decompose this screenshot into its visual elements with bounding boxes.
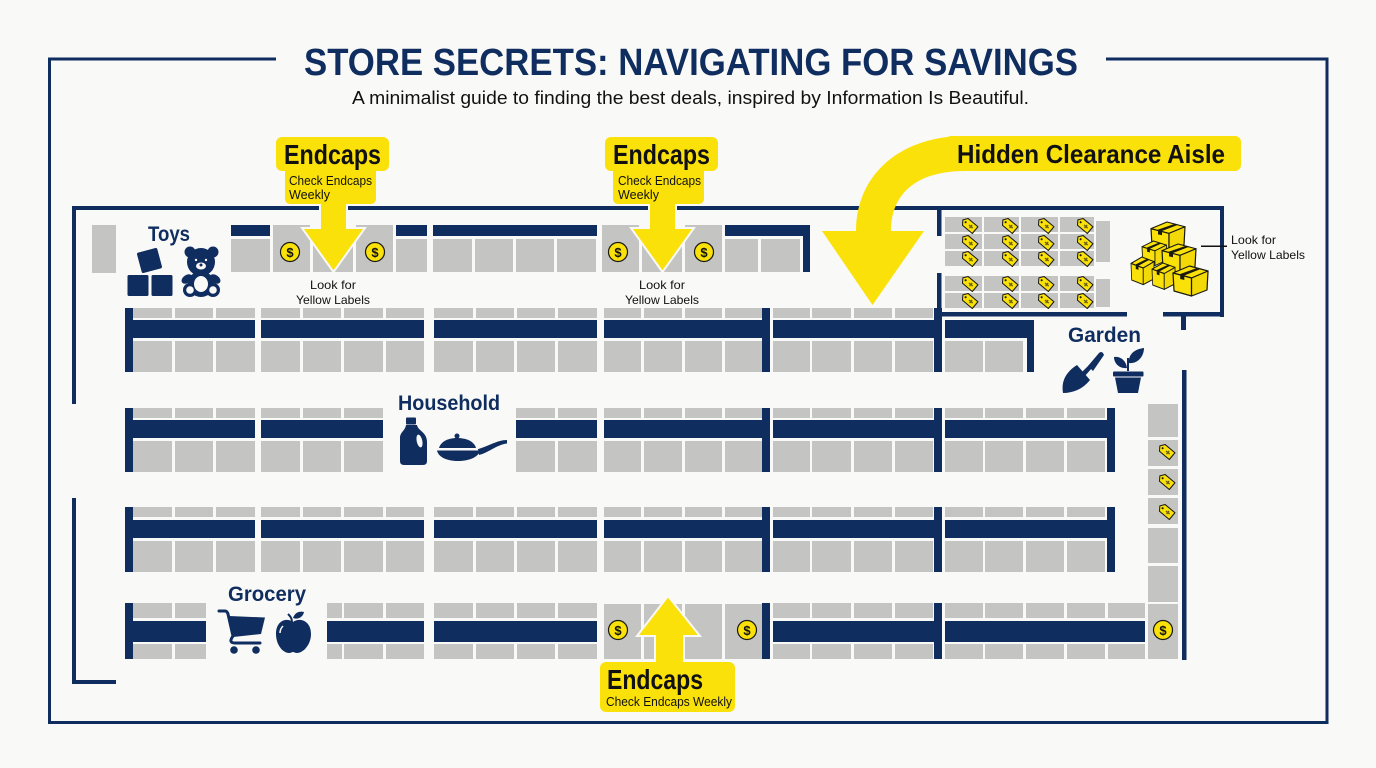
dollar coins: $	[286, 245, 294, 260]
title: STORE SECRETS: NAVIGATING FOR SAVINGS	[304, 42, 1078, 84]
side price tags	[1157, 442, 1175, 520]
callout: look for yellow labels left: Yellow Labels	[296, 293, 370, 307]
icon: garden trowel	[1063, 352, 1104, 393]
aisle row 3	[125, 507, 1115, 572]
subtitle: A minimalist guide to finding the best deals, inspired by Information Is Beautiful.	[352, 88, 1029, 108]
arrow: endcaps bottom	[637, 596, 700, 664]
arrow: endcaps top centre	[631, 200, 694, 272]
clearance aisle shelves	[945, 217, 1110, 308]
top aisle row	[92, 225, 810, 273]
callout: look for yellow labels left: Look for	[310, 278, 356, 292]
right side shelf column	[1148, 404, 1178, 659]
dollar coins: $	[614, 623, 622, 638]
label: endcaps bottom	[600, 662, 735, 712]
callout: look for yellow labels, clearance: Yellow Labels	[1231, 248, 1305, 262]
label: toys: Toys	[148, 223, 190, 246]
label: endcaps bottom: Endcaps	[607, 664, 703, 695]
label: endcaps bottom: Check Endcaps Weekly	[606, 694, 732, 709]
store walls	[72, 206, 1224, 684]
label: endcaps top left: Check Endcaps	[289, 173, 372, 188]
icon: stacked yellow boxes	[1131, 222, 1208, 296]
label: garden: Garden	[1068, 324, 1141, 347]
label: hidden clearance aisle: Hidden Clearance Aisle	[957, 139, 1225, 169]
dollar coins: $	[371, 245, 379, 260]
icon: shopping cart	[219, 611, 265, 654]
label: household: Household	[398, 392, 500, 415]
dollar coins: $	[743, 623, 751, 638]
label: endcaps top centre: Weekly	[618, 187, 659, 202]
callout: look for yellow labels, clearance: Look for	[1231, 233, 1276, 247]
arrow: endcaps top left	[302, 200, 365, 272]
icon: toy blocks	[128, 248, 172, 296]
callout: look for yellow labels centre: Yellow Labels	[625, 293, 699, 307]
callout: look for yellow labels centre	[625, 278, 699, 307]
icon: potted plant	[1113, 348, 1144, 393]
icon: detergent bottle	[400, 418, 427, 465]
dollar coins	[280, 242, 1172, 640]
icon: frying pan	[437, 434, 507, 461]
label: endcaps top centre: Check Endcaps	[618, 173, 701, 188]
dollar coins: $	[1159, 623, 1167, 638]
arrow: hidden clearance aisle	[822, 136, 965, 305]
icon: teddy bear	[180, 246, 222, 297]
label: endcaps top left: Weekly	[289, 187, 330, 202]
callout: look for yellow labels, clearance	[1201, 233, 1305, 262]
clearance price tags	[960, 216, 1093, 309]
aisle row 4	[125, 603, 1145, 659]
aisle row 2	[125, 408, 1115, 472]
callout: look for yellow labels centre: Look for	[639, 278, 685, 292]
label: endcaps top centre	[605, 137, 718, 204]
callout: look for yellow labels left	[296, 278, 370, 307]
aisle row 1	[125, 308, 1034, 372]
icon: apple	[276, 612, 311, 653]
label: endcaps top left	[276, 137, 389, 204]
label: endcaps top left: Endcaps	[284, 139, 381, 170]
label: endcaps top centre: Endcaps	[613, 139, 710, 170]
dollar coins: $	[614, 245, 622, 260]
label: grocery: Grocery	[228, 583, 306, 606]
dollar coins: $	[700, 245, 708, 260]
